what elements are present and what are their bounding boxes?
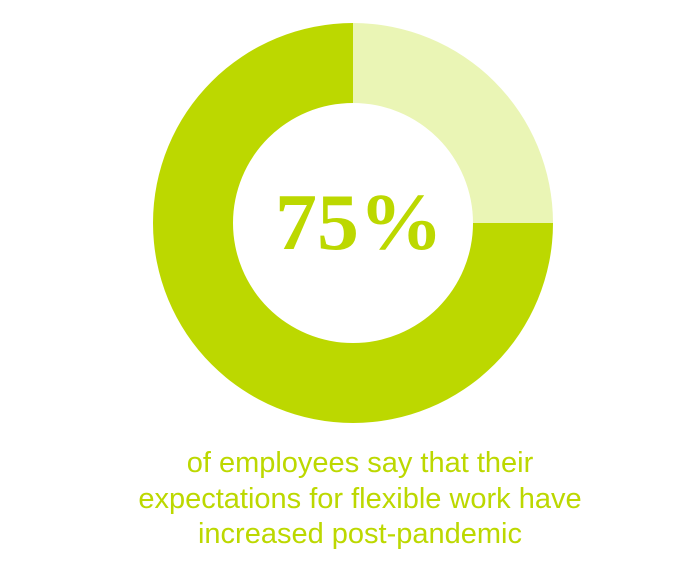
- caption: expectations for flexible work have: [138, 482, 582, 514]
- caption: of employees say that their: [187, 447, 533, 479]
- caption: [138, 447, 582, 550]
- segment: 75%: [153, 23, 553, 423]
- center value: 75%: [275, 179, 443, 267]
- caption: increased post-pandemic: [198, 518, 522, 550]
- segment: 25%: [353, 23, 553, 223]
